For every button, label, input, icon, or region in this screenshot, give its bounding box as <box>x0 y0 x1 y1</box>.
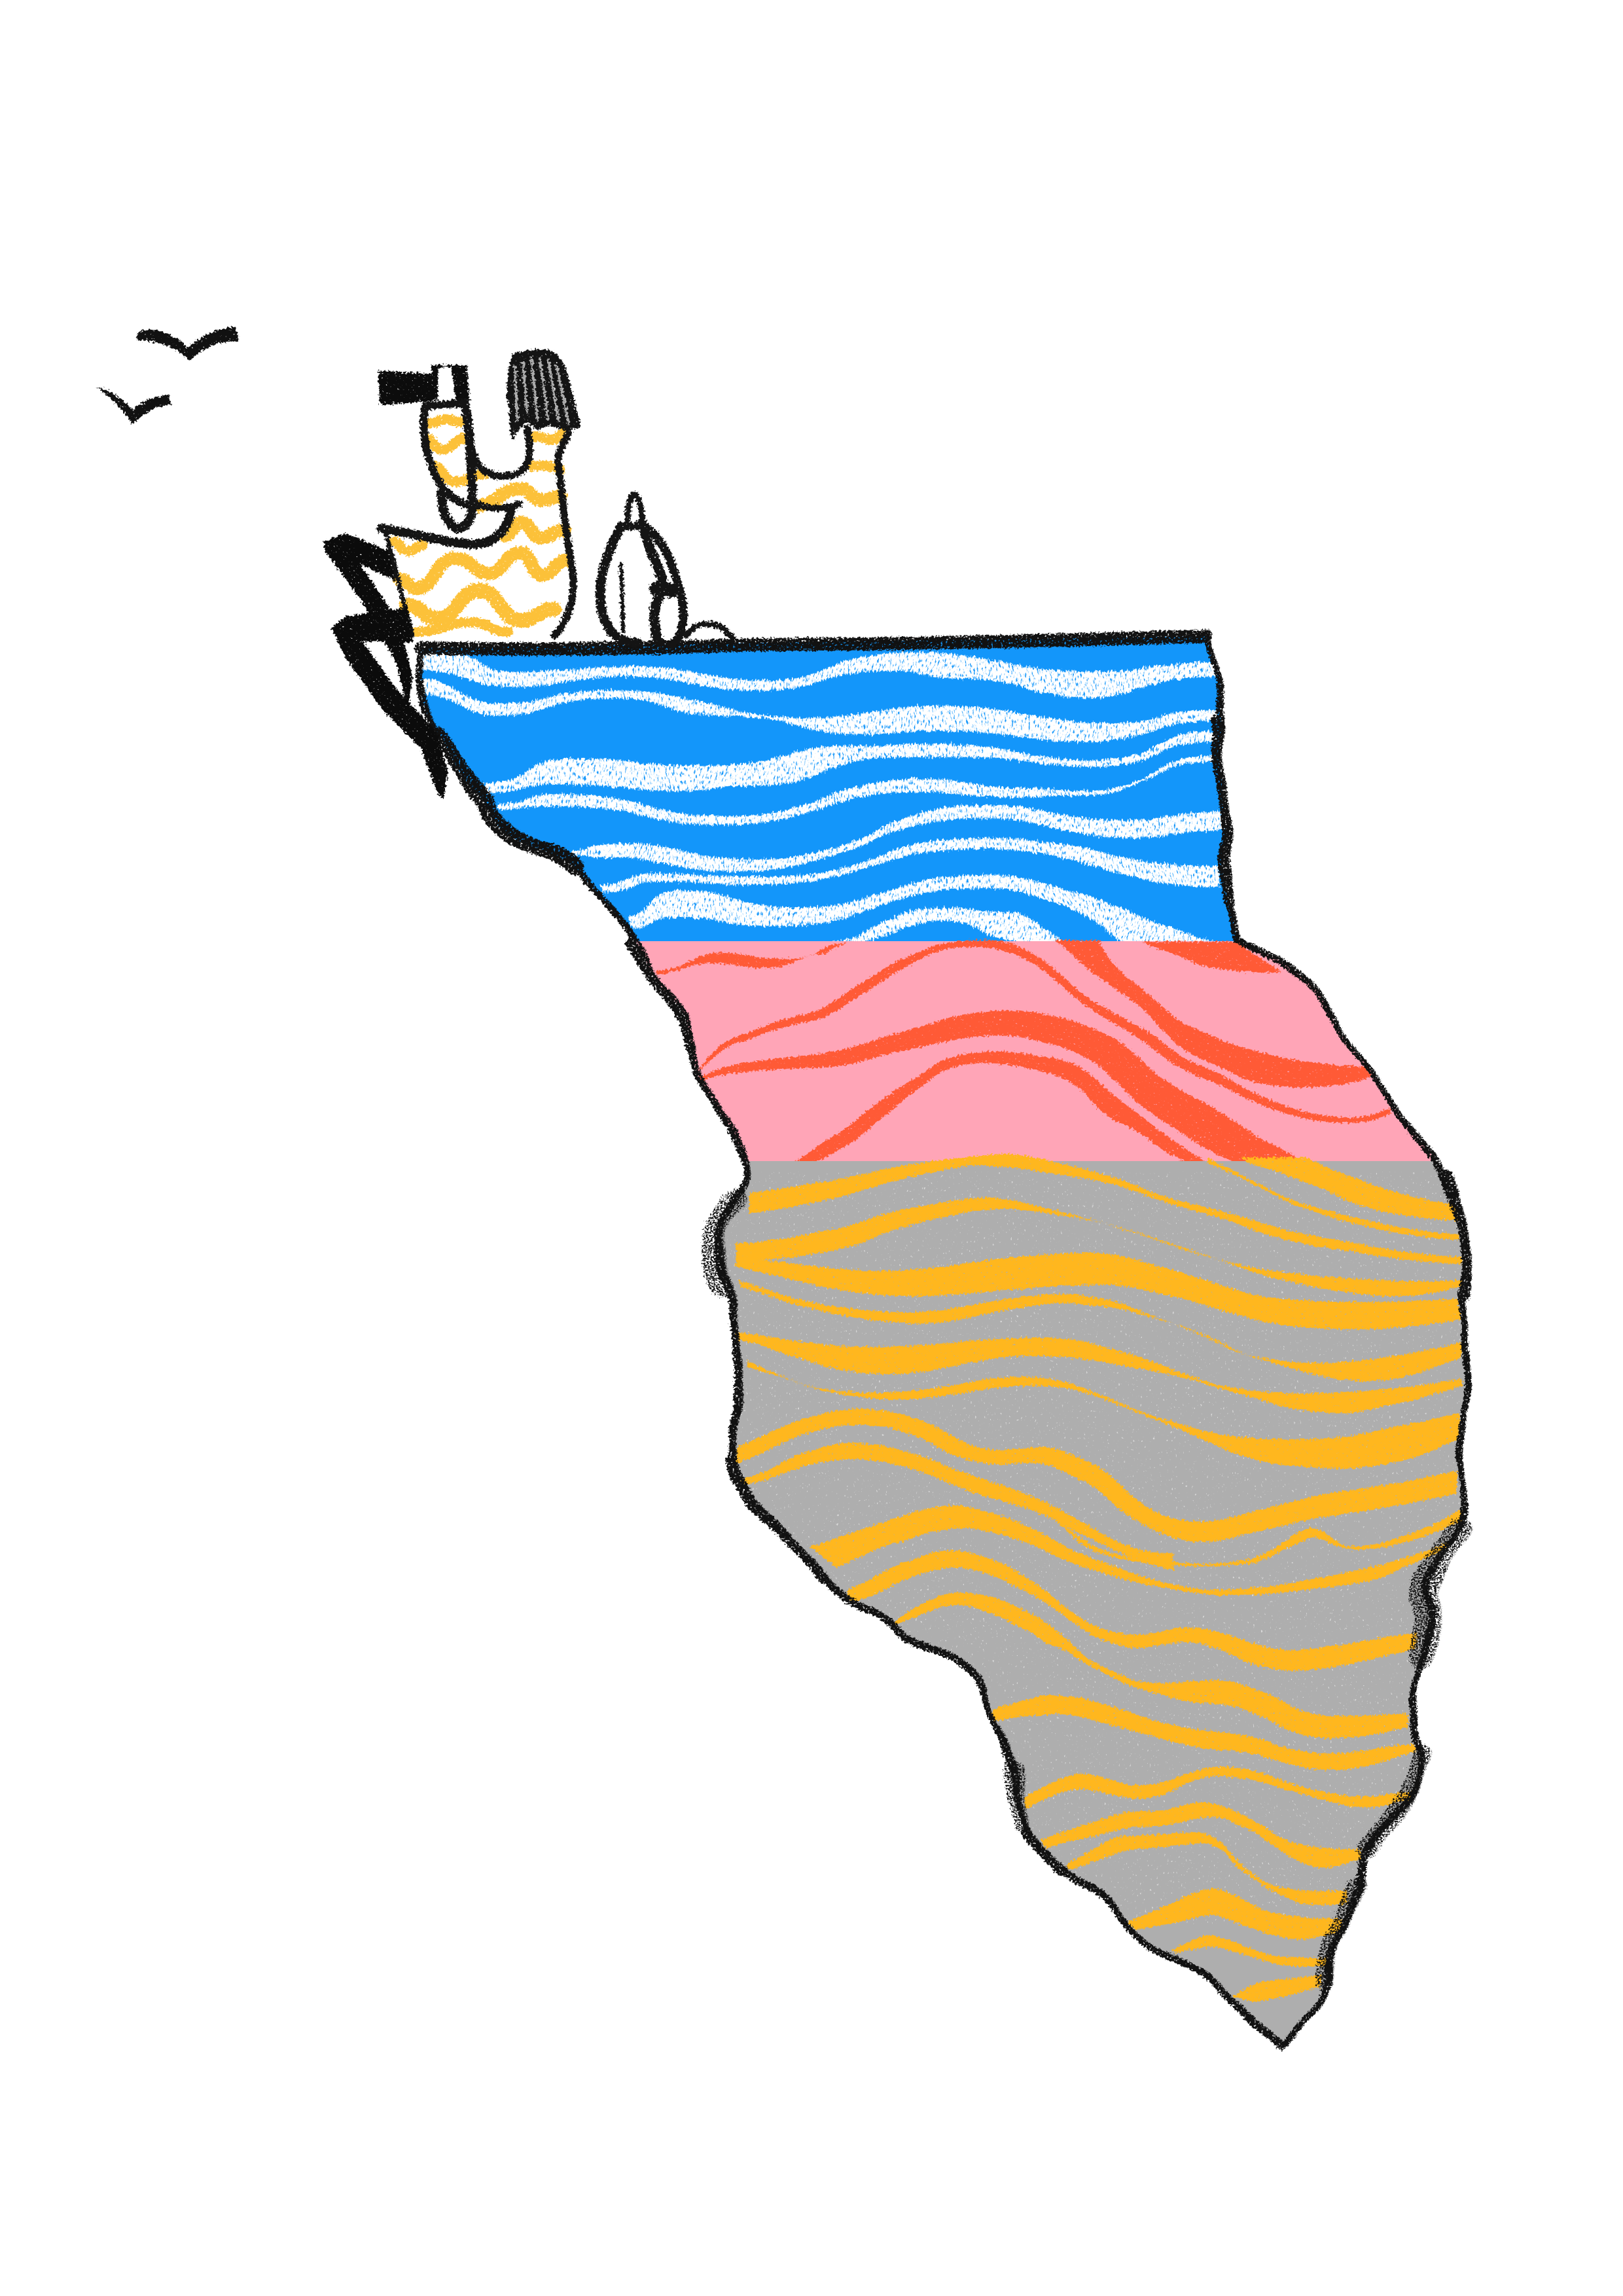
illustration: person with binoculars on layered cliff <box>96 326 1474 2052</box>
hair <box>507 350 582 435</box>
cliff with rock layers <box>393 628 1505 2077</box>
backpack <box>600 495 733 645</box>
layer: pink stratum with red veins <box>636 939 1432 1161</box>
cliff charcoal outline <box>419 636 1470 2047</box>
chalk specks on grey <box>720 1172 1466 1924</box>
binoculars <box>378 365 470 404</box>
legs <box>324 533 448 799</box>
layer: grey stratum with yellow veins <box>719 1152 1469 2046</box>
body and arm outline <box>381 403 573 636</box>
charcoal side shading on cliff edge <box>715 1199 1461 1983</box>
shirt stripes <box>394 420 567 632</box>
layer: blue water stratum <box>393 628 1257 942</box>
person with binoculars <box>324 350 733 799</box>
birds <box>96 327 240 424</box>
